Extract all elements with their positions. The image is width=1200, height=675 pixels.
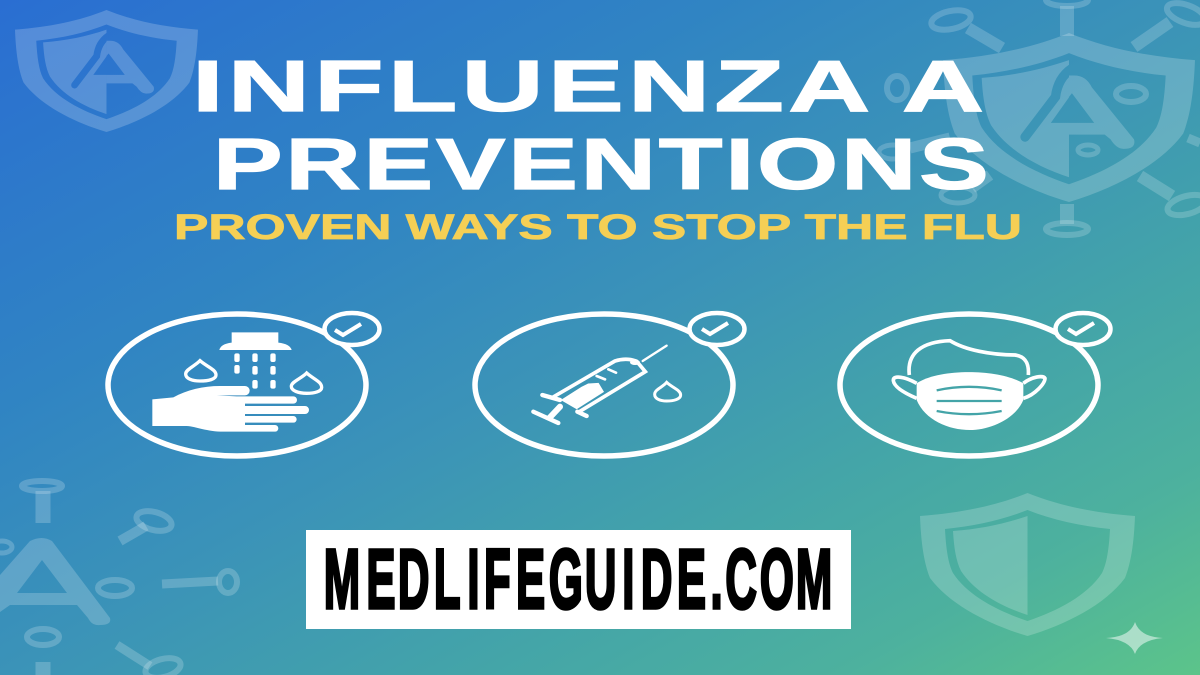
subtitle: PROVEN WAYS TO STOP THE FLU [174,208,1022,247]
shield watermark: top left [15,10,198,132]
sparkle [1106,622,1163,654]
icon: vaccine syringe [475,313,744,456]
shield [943,33,1195,202]
virus and shield watermark: top right [879,0,1200,235]
title [192,47,989,205]
virus spikes [879,0,1200,235]
letter A [0,538,110,625]
virus and letter A watermark: bottom left [0,481,237,675]
icon: face mask [840,313,1110,456]
icon: handwashing [108,313,380,456]
title: PREVENTIONS [213,125,989,205]
badge: check mark [1056,313,1110,345]
shield watermark: bottom right [920,493,1135,636]
website banner: MEDLIFEGUIDE.COM [324,533,832,627]
badge: check mark [690,313,744,345]
title: INFLUENZA A [192,47,984,127]
badge: check mark [324,313,380,345]
